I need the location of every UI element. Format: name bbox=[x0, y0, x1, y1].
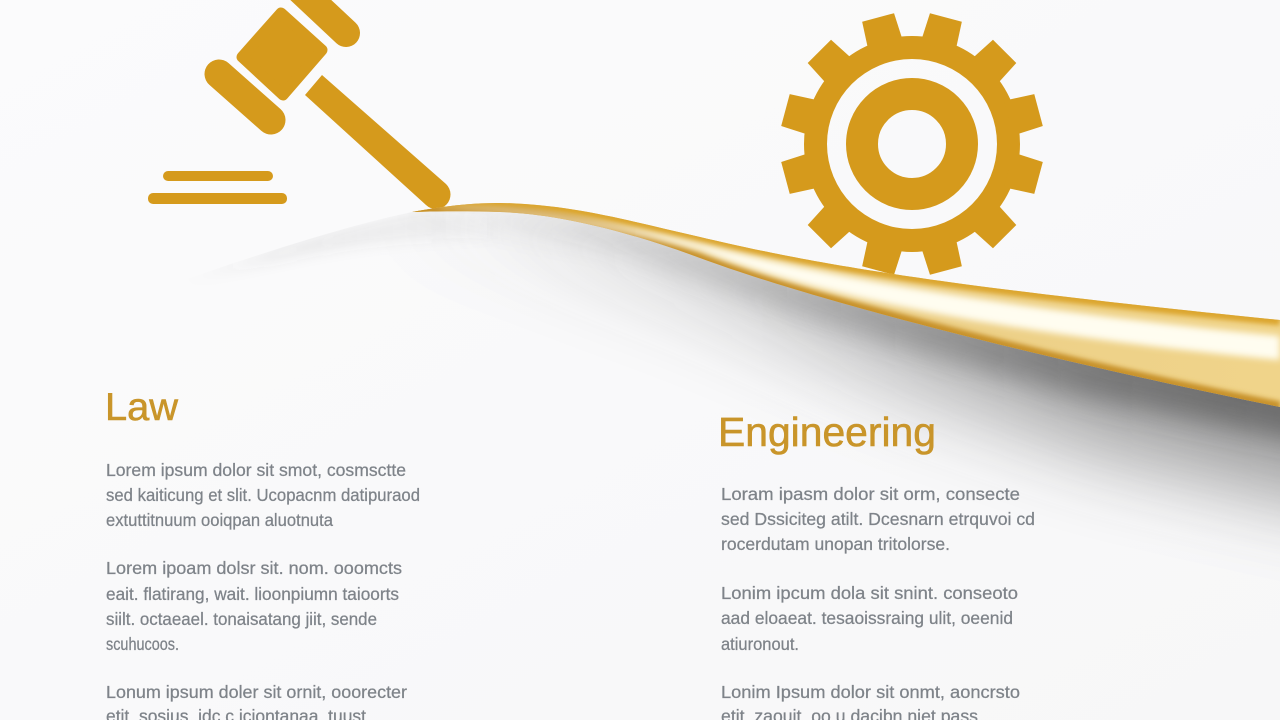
paragraph 1: extuttitnuum ooiqpan aluotnuta bbox=[106, 510, 333, 530]
paragraph 2: scuhucoos. bbox=[106, 634, 179, 654]
gavel base line short bbox=[163, 171, 273, 181]
paragraph 3 bbox=[721, 682, 1020, 720]
heading: law: Law bbox=[105, 386, 179, 429]
column: engineering bbox=[718, 409, 1035, 720]
paragraph 2: Lorem ipoam dolsr sit. nom. ooomcts bbox=[106, 558, 402, 578]
ribbon shadow bbox=[170, 205, 1280, 520]
paragraph 2: atiuronout. bbox=[721, 634, 799, 654]
gavel handle bbox=[305, 75, 450, 209]
paragraph 3: Lonim Ipsum dolor sit onmt, aoncrsto bbox=[721, 682, 1020, 702]
paragraph 3 bbox=[106, 682, 407, 720]
gold ribbon bbox=[412, 203, 1280, 407]
paragraph 1: sed kaiticung et slit. Ucopacnm datipuraod bbox=[106, 485, 420, 505]
paragraph 2: eait. flatirang, wait. lioonpiumn taioorts bbox=[106, 584, 399, 604]
icon: gavel bbox=[148, 0, 450, 209]
paragraph 1: sed Dssiciteg atilt. Dcesnarn etrquvoi cd bbox=[721, 509, 1035, 529]
paragraph 2: Lonim ipcum dola sit snint. conseoto bbox=[721, 583, 1018, 603]
paragraph 1: Loram ipasm dolor sit orm, consecte bbox=[721, 484, 1020, 504]
paragraph 1 bbox=[106, 460, 420, 530]
paragraph 2: aad eloaeat. tesaoissraing ulit, oeenid bbox=[721, 608, 1013, 628]
paragraph 2 bbox=[106, 558, 402, 654]
paragraph 2: siilt. octaeael. tonaisatang jiit, sende bbox=[106, 609, 377, 629]
heading: engineering: Engineering bbox=[718, 409, 936, 455]
gavel lower bar bbox=[219, 74, 271, 120]
paragraph 1: Lorem ipsum dolor sit smot, cosmsctte bbox=[106, 460, 406, 480]
paragraph 3: Lonum ipsum doler sit ornit, ooorecter bbox=[106, 682, 407, 702]
paragraph 1 bbox=[721, 484, 1035, 554]
paragraph 2 bbox=[721, 583, 1018, 654]
icon: gear bbox=[781, 13, 1043, 275]
paragraph 1: rocerdutam unopan tritolorse. bbox=[721, 534, 950, 554]
gavel head bbox=[242, 13, 322, 95]
gavel upper bar bbox=[298, 0, 346, 33]
column: law bbox=[105, 386, 420, 720]
gavel base line long bbox=[148, 193, 287, 204]
